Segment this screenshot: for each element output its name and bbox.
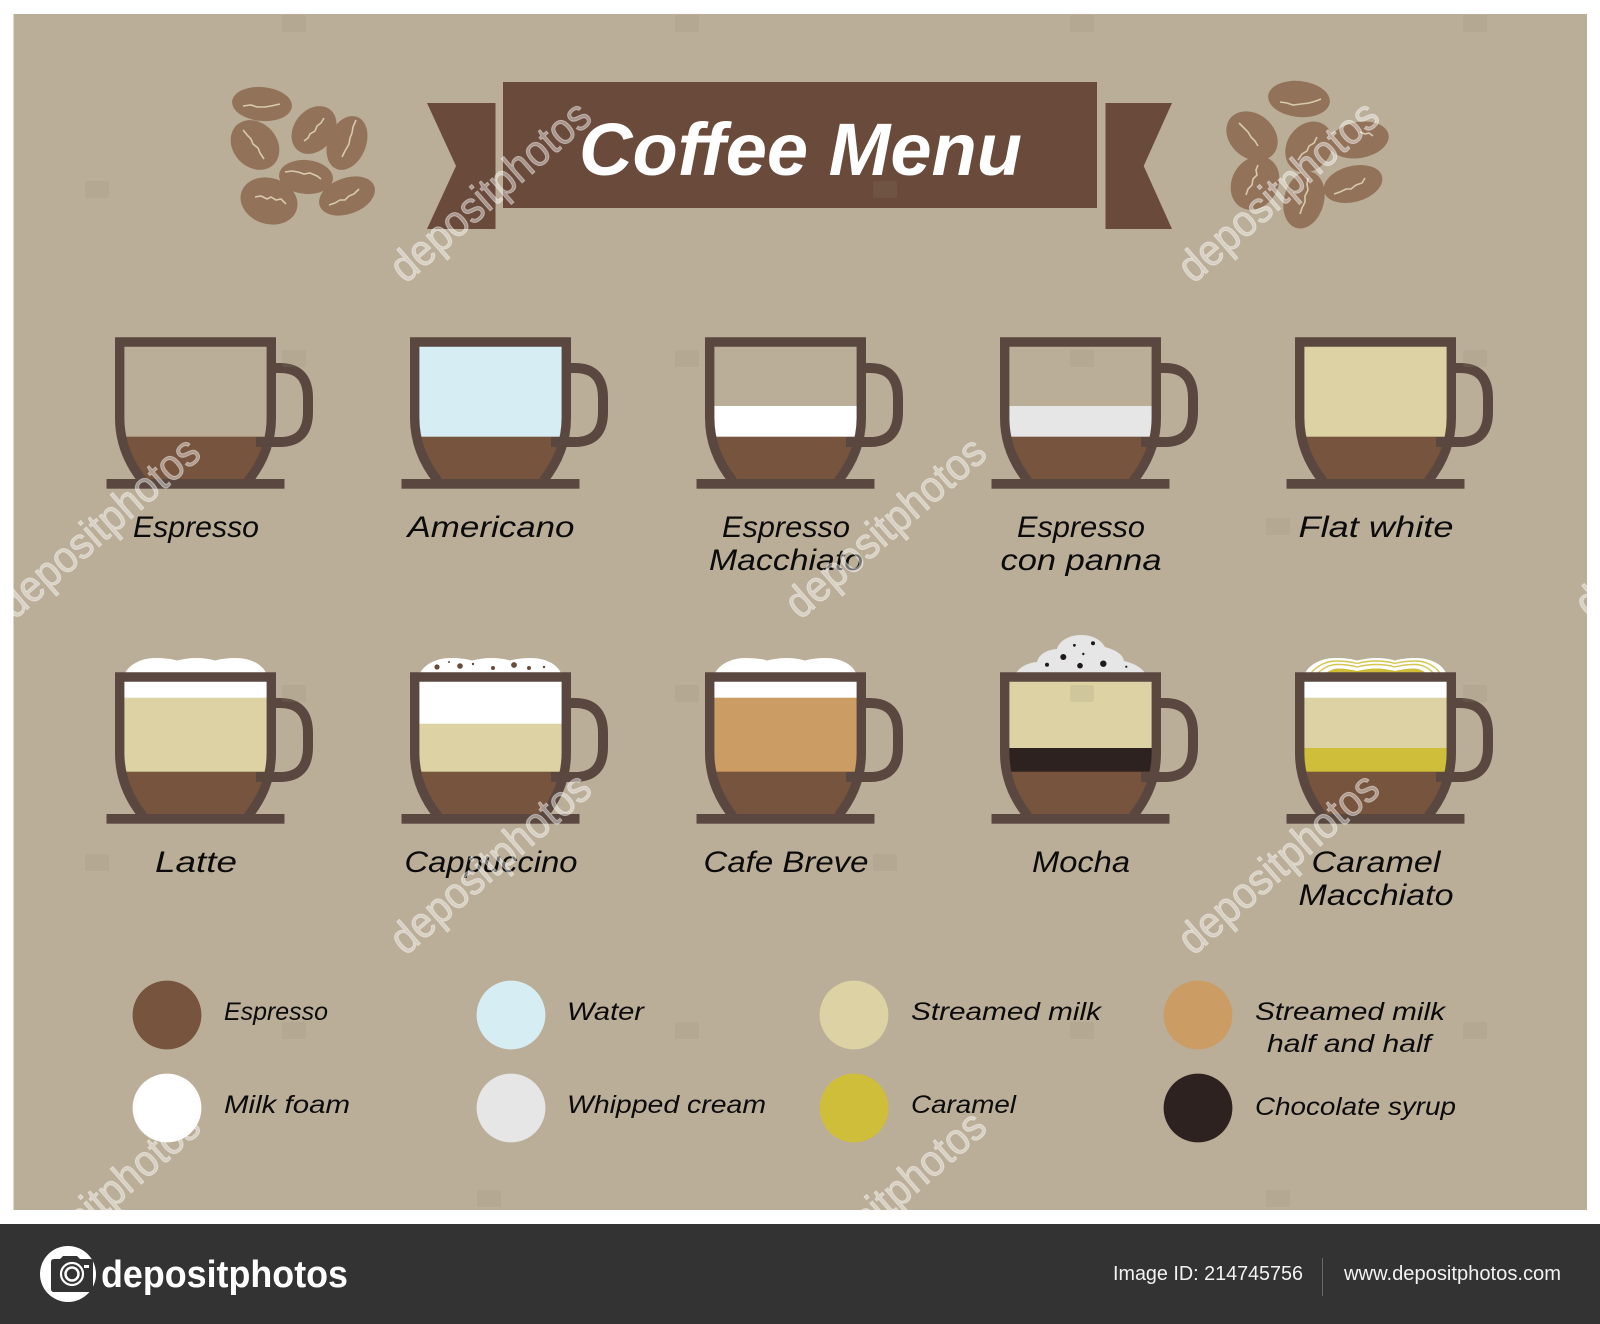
legend item: Streamed milk: Streamed milk	[911, 998, 1103, 1026]
legend item: Whipped cream: Whipped cream	[567, 1091, 766, 1119]
watermark: depositphotos text: depositphotos	[380, 91, 601, 292]
cup: Cappuccino: Cappuccino	[404, 846, 578, 879]
cup: Flat white	[1286, 342, 1488, 544]
cup: Espresso: Espresso	[133, 511, 259, 544]
legend item: Espresso: Espresso	[224, 998, 328, 1026]
banner left ribbon	[427, 103, 496, 229]
legend item: Milk foam	[133, 1074, 350, 1142]
legend item: Streamed milk half and half: half and half	[1267, 1030, 1435, 1058]
title text: Coffee Menu	[579, 108, 1022, 191]
cup: Mocha: Mocha	[1032, 846, 1130, 879]
cup: Flat white: Flat white	[1298, 511, 1454, 544]
legend	[133, 981, 1456, 1142]
logo wordmark: depositphotos	[101, 1254, 348, 1296]
cup: Caramel Macchiato: Macchiato	[1298, 879, 1454, 912]
image ID: Image ID: 214745756	[1113, 1263, 1303, 1285]
legend item: Water: Water	[567, 998, 646, 1026]
cup: Caramel Macchiato: Caramel	[1312, 846, 1442, 879]
cup: Caramel Macchiato	[1286, 658, 1488, 912]
legend item: Streamed milk half and half	[1164, 981, 1447, 1058]
cup: Espresso Macchiato: Espresso	[722, 511, 850, 544]
cup: Cappuccino	[402, 658, 603, 879]
cup: Latte: Latte	[155, 846, 237, 879]
title banner	[427, 82, 1172, 229]
cup: Cafe Breve	[696, 658, 898, 879]
icon: camera logo	[40, 1246, 96, 1302]
legend item: Chocolate syrup	[1164, 1074, 1456, 1142]
banner right ribbon	[1106, 103, 1172, 229]
watermark: depositphotos text: depositphotos	[775, 427, 996, 628]
cup: Espresso	[106, 342, 308, 544]
decoration: right coffee beans	[1216, 78, 1392, 233]
cup: Cafe Breve: Cafe Breve	[704, 846, 868, 879]
legend item: Milk foam: Milk foam	[224, 1091, 350, 1119]
cup: Latte	[106, 658, 308, 879]
legend item: Streamed milk half and half: Streamed milk	[1255, 998, 1447, 1026]
watermark: small camera marks	[85, 15, 1487, 1207]
watermark: depositphotos text: depositphotos	[775, 1101, 996, 1302]
banner main band	[503, 82, 1097, 208]
watermark: depositphotos text: depositphotos	[1168, 763, 1389, 964]
cup: Espresso con panna: con panna	[1000, 544, 1162, 577]
watermark: depositphotos text: depositphotos	[1168, 91, 1389, 292]
cup: Mocha	[992, 635, 1193, 879]
cup: Espresso con panna: Espresso	[1017, 511, 1145, 544]
cup: Americano: Americano	[405, 511, 574, 544]
legend item: Espresso	[133, 981, 328, 1049]
legend item: Water	[477, 981, 646, 1049]
footer bar	[0, 1224, 1600, 1324]
watermark: depositphotos text: depositphotos	[380, 763, 601, 964]
legend item: Caramel	[820, 1074, 1018, 1142]
legend item: Streamed milk	[820, 981, 1103, 1049]
legend item: Caramel: Caramel	[911, 1091, 1018, 1119]
cup: Espresso con panna	[992, 342, 1193, 577]
legend item: Whipped cream	[477, 1074, 766, 1142]
legend item: Chocolate syrup: Chocolate syrup	[1255, 1093, 1456, 1121]
cup: Americano	[402, 342, 603, 544]
decoration: left coffee beans	[221, 84, 380, 232]
website URL: www.depositphotos.com	[1343, 1263, 1561, 1285]
cup: Espresso Macchiato	[696, 342, 898, 577]
cup: Espresso Macchiato: Macchiato	[709, 544, 863, 577]
